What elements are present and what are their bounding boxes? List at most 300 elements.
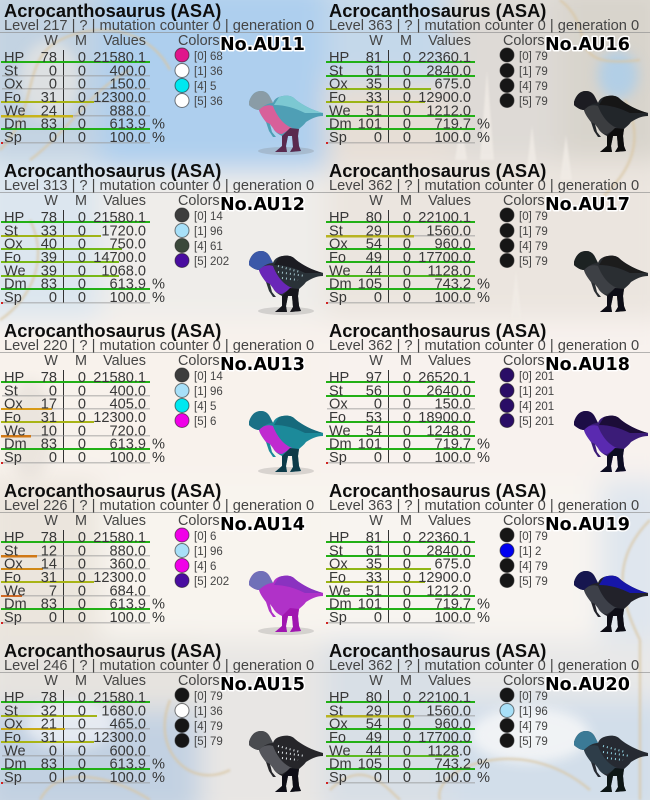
stats table: 0 [49,450,57,466]
stats table: We [329,583,351,599]
stats table: 750.0 [109,237,146,253]
stats table: % [477,437,490,453]
stats table: 0 [403,383,411,399]
stats table: 39 [41,263,57,279]
stats table: 0 [403,90,411,106]
stats table: Fo [329,570,346,586]
color swatches: [0] 79 [519,51,548,63]
stats table: 32 [41,703,57,719]
stats table: 22100.1 [418,210,471,226]
stats table: Fo [329,250,346,266]
stats table: 12300.0 [93,730,146,746]
color swatches: [4] 79 [519,81,548,93]
color swatches: Colors [178,193,220,209]
stats table: 100.0 [434,290,471,306]
stats table: 465.0 [109,717,146,733]
stats table: 100.0 [434,450,471,466]
color swatches: [4] 79 [519,561,548,573]
level line: Level 246 | ? | mutation counter 0 | generation 0 [4,658,314,674]
stats table: 719.7 [434,597,471,613]
stats table: 1128.0 [427,743,471,759]
stats table: 22100.1 [418,690,471,706]
stats table: Sp [4,450,22,466]
stats table: 21580.1 [93,50,146,66]
stats table: 360.0 [109,557,146,573]
stats table: 83 [41,757,57,773]
stats table: 53 [366,410,382,426]
stats table: Values [103,673,146,689]
stats table: Ox [329,77,348,93]
stats table: 0 [78,370,86,386]
stats table: We [4,263,26,279]
stats table: 0 [78,410,86,426]
dinosaur [249,411,323,475]
dinosaur [249,571,323,635]
stats table: Sp [4,130,22,146]
stats table: 0 [403,103,411,119]
stats table: Fo [4,250,21,266]
stats table: HP [4,690,24,706]
color swatches: Colors [503,513,545,529]
label: No.AU20: No.AU20 [545,675,630,695]
stats table: 14 [41,557,57,573]
stats table: 12300.0 [93,90,146,106]
stats table: 675.0 [434,557,471,573]
stats table: Sp [4,770,22,786]
color swatches: [0] 79 [519,211,548,223]
stats table: 0 [78,210,86,226]
dinosaur [574,251,648,312]
stats table: 7 [49,583,57,599]
stats table: 81 [366,530,382,546]
stats table [326,193,490,306]
stats table: HP [329,690,349,706]
stats table: W [369,673,383,689]
stats table: Ox [329,237,348,253]
label: No.AU17: No.AU17 [545,195,630,215]
stats table: 35 [366,77,382,93]
stats table: 0 [78,597,86,613]
color swatches: [1] 96 [194,226,223,238]
stats table: 0 [403,263,411,279]
level line: Level 217 | ? | mutation counter 0 | generation 0 [4,18,314,34]
color swatches: [4] 61 [194,241,223,253]
color swatches: [4] 5 [194,81,216,93]
stats table: 33 [366,90,382,106]
stats table: % [477,450,490,466]
color swatches: [4] 79 [519,721,548,733]
stats table: 0 [78,437,86,453]
color swatches: [5] 36 [194,96,223,108]
stats table: 1560.0 [426,223,471,239]
color swatches: [5] 79 [519,256,548,268]
color swatches: [1] 36 [194,706,223,718]
stats table: M [400,673,412,689]
stats table: 743.2 [434,277,471,293]
dinosaur [249,251,323,315]
color swatches: [4] 5 [194,401,216,413]
stats table: Values [103,33,146,49]
stats table: We [329,263,351,279]
stats table: Values [103,353,146,369]
stats table: We [4,423,26,439]
stats table: 1680.0 [101,703,146,719]
panel: AU16 [325,0,650,152]
stats table: % [152,290,165,306]
level line: Level 226 | ? | mutation counter 0 | generation 0 [4,498,314,514]
stats table: % [152,770,165,786]
stats table: 0 [78,223,86,239]
stats table: Fo [4,570,21,586]
color swatches: Colors [178,353,220,369]
color swatches: [5] 201 [519,416,554,428]
stats table: We [329,743,351,759]
stats table: St [329,223,343,239]
color swatches: [4] 79 [194,721,223,733]
stats table: 2640.0 [426,383,471,399]
label: No.AU13: No.AU13 [220,355,305,375]
label: No.AU16: No.AU16 [545,35,630,55]
stats table: 21580.1 [93,210,146,226]
color swatches: [0] 201 [519,371,554,383]
stats table: 960.0 [434,717,471,733]
stats table: 1248.0 [426,423,471,439]
stats table: 0 [78,703,86,719]
stats table: 0 [78,237,86,253]
stats table: 0 [374,770,382,786]
stats table: 83 [41,117,57,133]
stats table: Ox [4,237,23,253]
stats table: 44 [366,263,382,279]
stats table: 0 [49,130,57,146]
stats table: Values [428,353,471,369]
stats table: 54 [366,717,382,733]
stats table: Fo [4,730,21,746]
stats table: 0 [403,370,411,386]
stats table: St [4,223,18,239]
stats table: 14700.0 [93,250,146,266]
stats table: 101 [358,597,382,613]
stats table: 0 [403,703,411,719]
stats table: 31 [41,730,57,746]
stats table: St [329,383,343,399]
stats table: 12900.0 [418,570,471,586]
stats table: 78 [41,690,57,706]
stats table: 600.0 [109,743,146,759]
color swatches: [1] 2 [519,546,541,558]
stats table: St [329,543,343,559]
stats table: 0 [78,50,86,66]
label: No.AU14: No.AU14 [220,515,305,535]
stats table: Fo [329,730,346,746]
stats table: 0 [403,730,411,746]
stats table: 0 [78,103,86,119]
color swatches: [5] 79 [519,96,548,108]
color swatches: Colors [503,33,545,49]
color swatches: [0] 79 [519,531,548,543]
color swatches [500,513,548,588]
stats table: M [75,673,87,689]
stats table: 0 [78,610,86,626]
stats table: 22360.1 [418,50,471,66]
label: No.AU11: No.AU11 [220,35,305,55]
stats table: 0 [49,77,57,93]
color swatches: [0] 14 [194,371,223,383]
dinosaur [249,731,323,792]
title: Acrocanthosaurus (ASA) [4,320,221,341]
stats table: 0 [78,717,86,733]
stats table: Sp [329,130,347,146]
stats table: 1068.0 [101,263,146,279]
stats table [1,673,165,786]
panel: AU20 [325,640,650,792]
color swatches: [0] 79 [519,691,548,703]
stats table: 0 [403,583,411,599]
stats table: Fo [329,90,346,106]
stats table: 29 [366,223,382,239]
level line: Level 363 | ? | mutation counter 0 | generation 0 [329,498,639,514]
stats table: Ox [4,717,23,733]
stats table: 100.0 [109,770,146,786]
stats table: 719.7 [434,437,471,453]
color swatches [175,193,229,268]
title: Acrocanthosaurus (ASA) [329,160,546,181]
stats table: 78 [41,210,57,226]
stats table: 0 [403,770,411,786]
stats table: 51 [366,583,382,599]
stats table: 0 [403,77,411,93]
stats table: W [44,513,58,529]
title: Acrocanthosaurus (ASA) [329,480,546,501]
stats table: 100.0 [109,610,146,626]
label: No.AU15: No.AU15 [220,675,305,695]
stats table: 0 [403,557,411,573]
stats table: 0 [374,290,382,306]
stats table: 0 [403,743,411,759]
stats table: 80 [366,210,382,226]
color swatches: [5] 79 [519,736,548,748]
stats table: % [152,597,165,613]
stats table: 101 [358,117,382,133]
stats table: 80 [366,690,382,706]
title: Acrocanthosaurus (ASA) [4,640,221,661]
dinosaur [249,91,323,155]
stats table: 0 [78,570,86,586]
stats table: % [477,277,490,293]
stats table: 12900.0 [418,90,471,106]
stats table: 0 [403,290,411,306]
stats table: 0 [78,557,86,573]
stats table: % [477,597,490,613]
stats table: 0 [374,397,382,413]
stats table: Ox [329,717,348,733]
label: No.AU12: No.AU12 [220,195,305,215]
stats table: 0 [49,63,57,79]
stats table: % [477,610,490,626]
stats table: 12 [41,543,57,559]
stats table: Sp [329,770,347,786]
stats table: HP [4,530,24,546]
stats table: HP [329,50,349,66]
stats table: 33 [41,223,57,239]
stats table: 1212.0 [426,583,471,599]
stats table: W [44,193,58,209]
stats table: M [75,33,87,49]
color swatches: [1] 79 [519,66,548,78]
panel: AU18 [325,320,650,472]
color swatches: [0] 6 [194,531,216,543]
stats table: 0 [78,770,86,786]
stats table: 0 [49,290,57,306]
stats table [1,33,165,146]
stats table: 18900.0 [418,410,471,426]
stats table: 100.0 [109,130,146,146]
color swatches: Colors [178,673,220,689]
stats table: We [4,743,26,759]
color swatches: Colors [503,353,545,369]
stats table: 49 [366,730,382,746]
stats table: Fo [329,410,346,426]
stats table: 0 [403,277,411,293]
stats table: 0 [403,223,411,239]
stats table: 26520.1 [418,370,471,386]
stats table: 400.0 [109,383,146,399]
stats table: 83 [41,597,57,613]
dinosaur [574,731,648,792]
level line: Level 363 | ? | mutation counter 0 | generation 0 [329,18,639,34]
stats table: 100.0 [109,290,146,306]
stats table: Sp [4,610,22,626]
stats table: 2840.0 [426,63,471,79]
stats table: 720.0 [109,423,146,439]
title: Acrocanthosaurus (ASA) [329,0,546,21]
color swatches [500,673,548,748]
stats table: 0 [374,130,382,146]
color swatches: [5] 202 [194,576,229,588]
stats table: 78 [41,370,57,386]
stats table: 0 [49,610,57,626]
color swatches: [4] 79 [519,241,548,253]
stats table: 150.0 [109,77,146,93]
stats table: Dm [4,277,27,293]
stats table: 78 [41,530,57,546]
stats table: 613.9 [109,437,146,453]
stats table: Values [103,513,146,529]
stats table: 684.0 [109,583,146,599]
stats table: 56 [366,383,382,399]
stats table: 0 [78,730,86,746]
stats table: 0 [403,610,411,626]
stats table: HP [329,530,349,546]
stats table: 31 [41,570,57,586]
stats table: 1560.0 [426,703,471,719]
color swatches: [1] 96 [519,706,548,718]
stats table: 0 [78,77,86,93]
title: Acrocanthosaurus (ASA) [4,480,221,501]
stats table: 0 [78,383,86,399]
stats table: 81 [366,50,382,66]
stats table: 83 [41,277,57,293]
stats table: HP [329,210,349,226]
stats table: HP [4,50,24,66]
stats table: M [75,193,87,209]
stats table: 719.7 [434,117,471,133]
stats table: 880.0 [109,543,146,559]
label: No.AU19: No.AU19 [545,515,630,535]
stats table: 0 [78,263,86,279]
stats table: 101 [358,437,382,453]
stats table: 54 [366,423,382,439]
stats table: 0 [78,290,86,306]
stats table [326,353,490,466]
stats table: Ox [329,557,348,573]
stats table: HP [4,370,24,386]
stats table: 0 [403,423,411,439]
stats table: Dm [329,277,352,293]
stats table: 29 [366,703,382,719]
stats table: Dm [329,757,352,773]
stats table: 12300.0 [93,410,146,426]
stats table: 0 [78,63,86,79]
stats table: 21580.1 [93,370,146,386]
stats table: We [329,423,351,439]
stats table: % [152,757,165,773]
stats table [326,513,490,626]
stats table: 0 [403,250,411,266]
stats table: 105 [358,277,382,293]
stats table: 0 [78,397,86,413]
stats table: St [4,383,18,399]
level line: Level 220 | ? | mutation counter 0 | generation 0 [4,338,314,354]
stats table: 0 [78,690,86,706]
stats table: St [329,703,343,719]
title: Acrocanthosaurus (ASA) [329,320,546,341]
stats table: 613.9 [109,757,146,773]
stats table: We [4,583,26,599]
stats table: % [152,277,165,293]
color swatches: [0] 14 [194,211,223,223]
stats table: Ox [329,397,348,413]
stats table: 44 [366,743,382,759]
stats table: Dm [329,117,352,133]
stats table: Fo [4,410,21,426]
color swatches: Colors [503,193,545,209]
stats table: 888.0 [109,103,146,119]
color swatches: Colors [178,513,220,529]
panel: AU14 [0,480,325,635]
stats table: 0 [403,410,411,426]
color swatches: [1] 79 [519,226,548,238]
stats table: 0 [78,757,86,773]
stats table: 49 [366,250,382,266]
stats table: Sp [329,450,347,466]
stats table: 35 [366,557,382,573]
color swatches [500,193,548,268]
stats table: W [369,33,383,49]
stats table: St [4,63,18,79]
stats table: 0 [403,237,411,253]
stats table: M [400,193,412,209]
stats table: Dm [329,597,352,613]
color swatches: [5] 79 [519,576,548,588]
color swatches: [5] 6 [194,416,216,428]
stats table: 0 [403,450,411,466]
stats table: Ox [4,77,23,93]
stats table: Sp [4,290,22,306]
stats table: % [152,450,165,466]
stats table: M [75,513,87,529]
stats table: 0 [49,743,57,759]
